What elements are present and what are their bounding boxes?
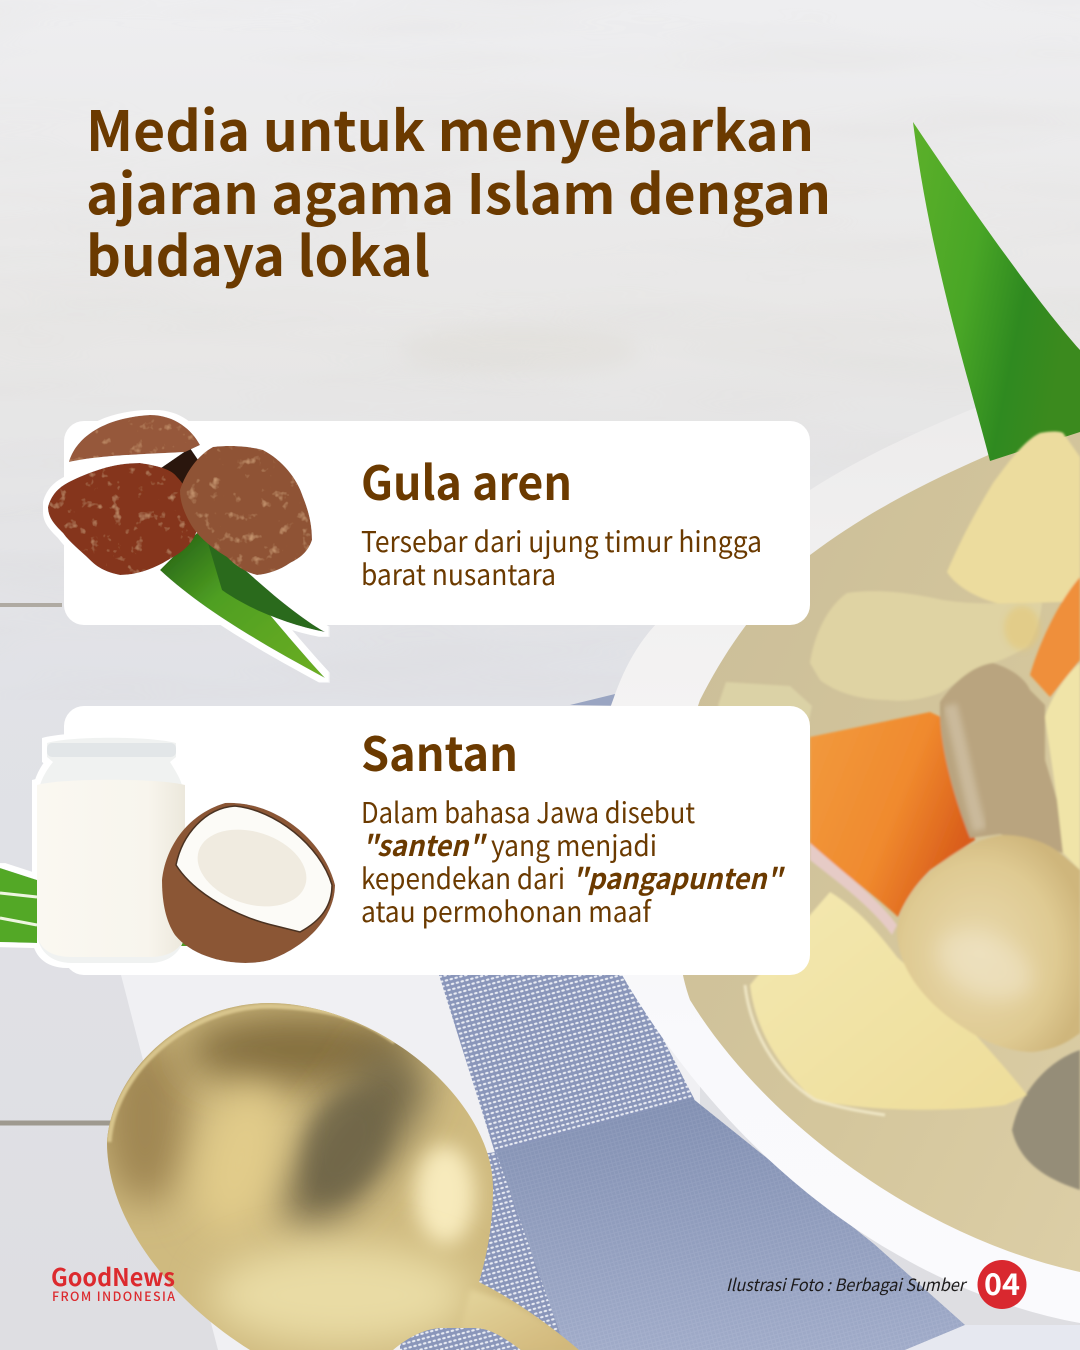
photo credit: Ilustrasi Foto : Berbagai Sumber [726, 1271, 967, 1296]
description: santan [361, 791, 785, 931]
title [86, 87, 831, 292]
translucent palm fruit [940, 663, 1063, 853]
description: santan: atau permohonan maaf [361, 890, 653, 931]
round palm fruit [897, 835, 1080, 1052]
heading: gula aren: Gula aren [361, 445, 572, 514]
description: santan: yang menjadi [491, 824, 657, 865]
soup ingredients [718, 432, 1080, 1190]
tablecloth [121, 694, 1080, 1350]
title: budaya lokal [86, 212, 430, 292]
description: gula aren: Tersebar dari ujung timur hingga [361, 520, 762, 561]
gold spoon [100, 995, 590, 1350]
dark piece lower right [1012, 1050, 1080, 1190]
page number badge [978, 1260, 1026, 1309]
large potato piece [750, 892, 1027, 1110]
page number badge: 04 [984, 1260, 1020, 1304]
description: gula aren: barat nusantara [361, 553, 556, 594]
description: gula aren [361, 520, 762, 594]
photo: palm sugar with pandan leaves [48, 415, 325, 678]
logo: GoodNews from Indonesia: GoodNews [51, 1258, 175, 1293]
soup [674, 420, 1080, 1272]
pandan leaf top right [913, 122, 1080, 461]
description: santan: "pangapunten" [572, 857, 785, 898]
potato piece top right [947, 432, 1080, 604]
carrot piece right [1030, 577, 1080, 697]
title: Media untuk menyebarkan [86, 87, 814, 167]
small potato piece [718, 682, 812, 725]
description: santan: Dalam bahasa Jawa disebut [361, 791, 695, 832]
description: santan: kependekan dari [361, 857, 565, 898]
logo: GoodNews from Indonesia: FROM INDONESIA [52, 1286, 175, 1305]
bowl with soup [597, 380, 1080, 1323]
title: ajaran agama Islam dengan [86, 150, 831, 230]
panel: gula aren [48, 415, 810, 678]
heading: santan: Santan [361, 716, 518, 785]
bowl rim [597, 380, 1080, 1323]
card background [64, 421, 810, 625]
large carrot piece [810, 712, 975, 917]
pink onion strip [810, 843, 897, 935]
card background [64, 706, 810, 975]
description: santan: "santen" [362, 824, 487, 865]
panel: santan [0, 706, 810, 975]
long potato piece [810, 591, 1042, 701]
potato piece right edge [1045, 663, 1080, 870]
photo: coconut milk jar and coconut [0, 738, 335, 963]
